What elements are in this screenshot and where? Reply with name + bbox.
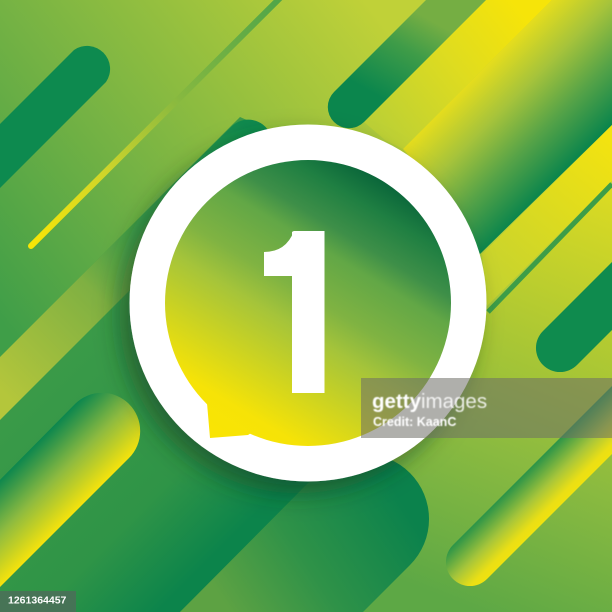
speech bubble inner xyxy=(165,160,451,446)
pill: behind circle top left xyxy=(160,120,268,210)
pill: bottom large green xyxy=(180,454,429,612)
watermark panel xyxy=(361,378,612,438)
number one xyxy=(264,231,324,393)
number one: 1 xyxy=(241,137,375,457)
watermark logo: gettyimages xyxy=(372,390,487,413)
pill: bottom right xyxy=(446,378,612,586)
image id label: 1261364457 xyxy=(8,594,67,606)
diagonal band: left dark green xyxy=(0,117,360,612)
pill: top left green xyxy=(0,46,110,198)
pill: right green xyxy=(536,254,612,372)
watermark credit: Credit: KaanC xyxy=(373,415,456,429)
diagonal band: left light green xyxy=(0,197,222,420)
pill: lower left gradient xyxy=(0,393,140,597)
speech bubble ring xyxy=(130,124,486,482)
pill: top right xyxy=(328,0,490,128)
image id label xyxy=(0,591,76,612)
thin diagonal line xyxy=(31,0,280,246)
thin line: right xyxy=(488,184,612,312)
band: large green-yellow gradient xyxy=(403,0,612,254)
band: yellow right xyxy=(482,125,612,306)
band: yellow top right xyxy=(364,0,552,149)
